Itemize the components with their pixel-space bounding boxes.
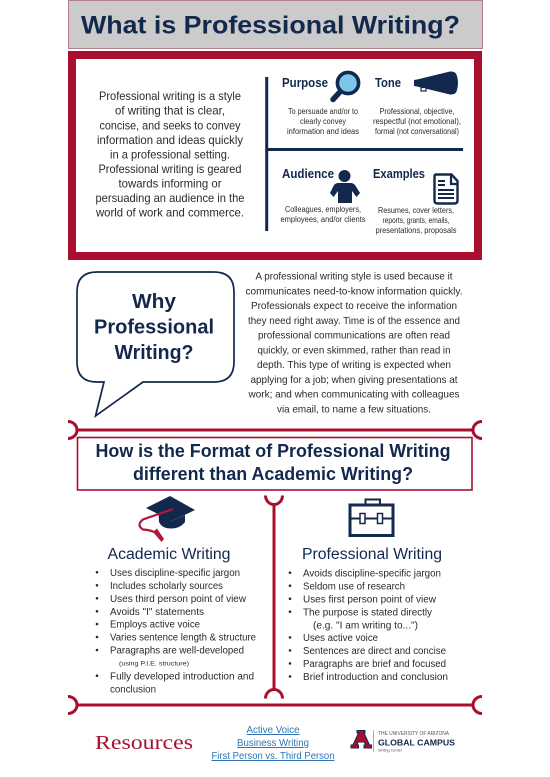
panel: professional writing: Professional Writing [302, 546, 442, 563]
logo: University of Arizona Global Campus: GLOBAL CAMPUS [378, 738, 455, 748]
definition text: Professional writing is geared [98, 163, 242, 176]
resources heading: Resources [95, 732, 193, 754]
audience block: Audience [282, 166, 334, 181]
callout: Why Professional Writing? [77, 272, 234, 416]
heading: format comparison [78, 438, 472, 490]
panel: academic writing: Fully developed introduction and [110, 671, 254, 682]
red rule bottom [68, 696, 482, 714]
panel: professional writing: Seldom use of research [303, 581, 405, 592]
purpose block: information and ideas [287, 127, 359, 136]
why paragraph: A professional writing style is used because it [256, 272, 453, 282]
panel: academic writing: Uses third person point of view [110, 594, 247, 605]
panel: academic writing: conclusion [110, 684, 156, 695]
tone block: respectful (not emotional), [373, 117, 461, 126]
panel: academic writing: Varies sentence length & structure [110, 633, 256, 644]
definition text: persuading an audience in the [96, 192, 244, 205]
panel: professional writing: The purpose is stated directly [303, 607, 432, 618]
why paragraph: Professionals expect to receive the information [251, 301, 457, 312]
why paragraph: professional communications are often read [258, 331, 450, 342]
panel: academic writing: Academic Writing [108, 546, 230, 563]
panel: academic writing [96, 496, 256, 695]
definition text: towards informing or [118, 178, 222, 190]
why paragraph: communicates need-to-know information quickly. [246, 286, 462, 297]
definition text [95, 90, 244, 220]
panel: professional writing: (e.g. "I am writing to...") [313, 620, 418, 631]
panel: professional writing: Paragraphs are brief and focused [303, 659, 446, 670]
resource links [212, 725, 334, 762]
resource links: Business Writing [237, 738, 309, 749]
tone block: Tone [375, 75, 401, 90]
title banner [68, 0, 482, 48]
purpose block: Purpose [282, 75, 328, 90]
panel: professional writing: Uses first person point of view [303, 594, 437, 605]
audience block: Colleagues, employers, [285, 205, 361, 214]
resource links: First Person vs. Third Person [212, 751, 334, 762]
resource links: Active Voice [246, 725, 300, 736]
icon: briefcase [350, 500, 393, 536]
tone block: Professional, objective, [380, 107, 454, 116]
tone block: formal (not conversational) [375, 127, 459, 136]
definition text: world of work and commerce. [95, 207, 244, 220]
heading: format comparison: How is the Format of Professional Writing [96, 441, 450, 461]
panel: academic writing: Uses discipline-specific jargon [110, 568, 240, 579]
audience block [280, 166, 366, 224]
panel: professional writing: Sentences are direct and concise [303, 646, 446, 657]
panel: definition [72, 55, 478, 256]
why paragraph: depth. This type of writing is expected when [257, 360, 451, 371]
panel: professional writing: Uses active voice [303, 633, 378, 644]
purpose block [282, 72, 359, 136]
vertical red divider [266, 496, 282, 698]
purpose block: To persuade and/or to [288, 107, 358, 116]
panel: professional writing: Brief introduction and conclusion [303, 672, 448, 683]
examples block: Resumes, cover letters, [378, 206, 454, 215]
callout: Why Professional Writing?: Professional [94, 316, 214, 338]
callout: Why Professional Writing?: Why [132, 291, 177, 313]
icon: document [434, 174, 458, 204]
why paragraph: work; and when communicating with colleagues [248, 390, 460, 401]
panel: academic writing: Avoids "I" statements [110, 607, 204, 618]
callout: Why Professional Writing?: Writing? [114, 342, 194, 364]
icon: graduation cap [140, 496, 195, 542]
red rule top [68, 422, 482, 438]
panel: academic writing: Employs active voice [110, 620, 200, 631]
examples block: reports, grants, emails, [382, 216, 450, 225]
icon: megaphone [414, 71, 458, 95]
icon: magnifying glass [333, 72, 359, 100]
examples block [373, 166, 458, 235]
tone block [373, 71, 461, 136]
why paragraph: applying for a job; when giving presentations at [250, 375, 458, 386]
examples block: presentations, proposals [376, 226, 456, 235]
logo: University of Arizona Global Campus: THE UNIVERSITY OF ARIZONA [378, 731, 450, 737]
panel: professional writing [289, 500, 448, 683]
examples block: Examples [373, 166, 425, 181]
panel: academic writing: (using P.I.E. structure) [119, 660, 189, 668]
icon: person [330, 170, 360, 203]
definition text: Professional writing is a style [99, 90, 241, 103]
logo: University of Arizona Global Campus [351, 730, 455, 752]
definition text: in a professional setting. [110, 148, 230, 161]
title banner: What is Professional Writing? [81, 11, 460, 39]
why paragraph [246, 272, 462, 415]
audience block: employees, and/or clients [280, 215, 366, 224]
panel: professional writing: Avoids discipline-specific jargon [303, 568, 441, 579]
panel: academic writing: Paragraphs are well-developed [110, 646, 244, 657]
why paragraph: they need right away. Time is of the essence and [248, 316, 460, 327]
why paragraph: via email, to name a few situations. [277, 404, 431, 415]
definition text: concise, and seeks to convey [100, 119, 241, 132]
why paragraph: quickly, or even skimmed, rather than read in [258, 345, 450, 356]
logo: University of Arizona Global Campus: Writing Center [378, 748, 403, 752]
panel: academic writing: Includes scholarly sources [110, 581, 223, 592]
heading: format comparison: different than Academic Writing? [133, 464, 413, 484]
definition text: information and ideas quickly [97, 134, 243, 147]
definition text: of writing that is clear, [115, 105, 225, 118]
purpose block: clearly convey [300, 117, 346, 126]
